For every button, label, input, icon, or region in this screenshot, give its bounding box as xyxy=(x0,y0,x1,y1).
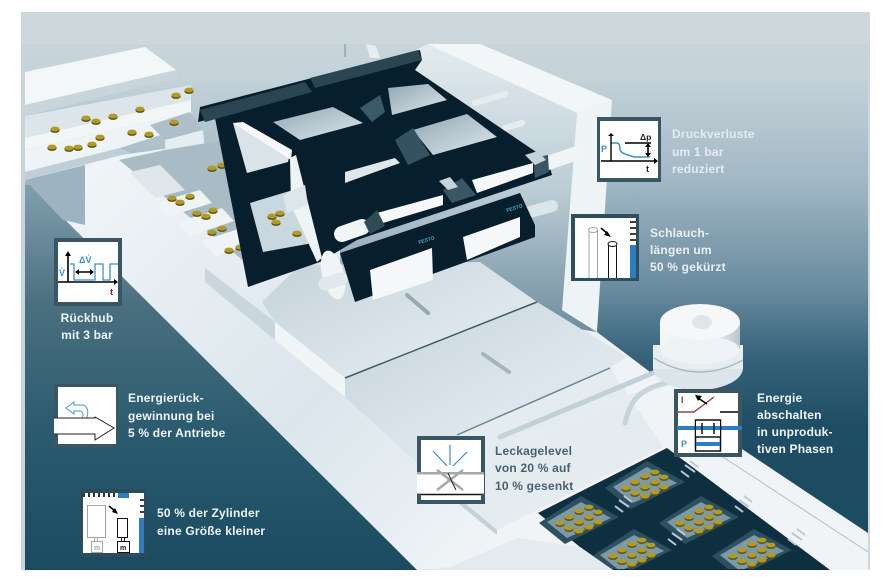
icon: energy recovery xyxy=(54,384,118,448)
icon: pressure drop: P xyxy=(601,144,607,154)
lower white rail xyxy=(417,538,613,570)
left dark floor xyxy=(25,185,332,488)
text: Rückhub: Rückhub xyxy=(61,311,113,325)
icon: flow rate pulse: V̇ xyxy=(59,268,65,278)
text: Druckverluste: Druckverluste xyxy=(672,127,755,141)
icon: pressure drop xyxy=(597,117,661,182)
valve cylinder xyxy=(653,304,743,390)
text: Energie abschalten: in unproduk- xyxy=(757,425,833,439)
icon: leakage xyxy=(417,436,485,504)
text: Zylinder: 50 % der Zylinder xyxy=(157,506,260,520)
text: Schlauchlängen: 50 % gekürzt xyxy=(650,260,726,274)
left edge strip xyxy=(21,44,25,570)
text: Leckagelevel: Leckagelevel xyxy=(495,444,572,458)
pill compartments xyxy=(119,141,243,260)
right frame upright xyxy=(340,44,612,332)
icon: pressure drop: Δp xyxy=(640,132,651,142)
text: Druckverluste: reduziert xyxy=(672,162,724,176)
text: Rückhub: mit 3 bar xyxy=(61,328,113,342)
upper film roller xyxy=(342,151,580,234)
lower film roll: FESTO xyxy=(506,203,524,214)
film windows xyxy=(388,84,447,115)
film tray with blister packs xyxy=(538,448,830,570)
text: Leckagelevel: 10 % gesenkt xyxy=(495,479,573,493)
text: Energie abschalten: tiven Phasen xyxy=(757,442,833,456)
film web xyxy=(198,50,552,287)
icon: switch off energy: P xyxy=(681,439,687,449)
icon: flow rate pulse xyxy=(54,238,122,306)
roll brand marks: FESTO xyxy=(418,235,436,246)
icon: flow rate pulse: t xyxy=(110,287,113,297)
icon: switch off energy xyxy=(674,389,742,457)
right edge strip xyxy=(868,12,870,570)
icon: smaller cylinder: m xyxy=(94,545,100,552)
text: Leckagelevel: von 20 % auf xyxy=(495,461,572,475)
icon: pressure drop: t xyxy=(646,164,649,174)
hopper conveyor xyxy=(25,47,205,225)
icon: smaller cylinder xyxy=(80,489,147,557)
icon: smaller cylinder: m xyxy=(120,545,126,552)
text: Schlauchlängen: längen um xyxy=(650,243,712,257)
text: Schlauchlängen: Schlauch- xyxy=(650,226,709,240)
icon: flow rate pulse: ΔV̇ xyxy=(79,255,91,265)
text: Energie abschalten: Energie xyxy=(757,391,803,405)
icon: shorter hoses xyxy=(571,214,639,281)
machine bed with rails xyxy=(25,130,868,570)
text: Druckverluste: um 1 bar xyxy=(672,145,724,159)
forming plates xyxy=(262,262,663,535)
text: Energierückgewinnung: 5 % der Antriebe xyxy=(128,426,226,440)
text: Energierückgewinnung: Energierück- xyxy=(128,391,204,405)
text: Energierückgewinnung: gewinnung bei xyxy=(128,409,215,423)
icon: switch off energy: I xyxy=(681,395,684,405)
text: Energie abschalten: abschalten xyxy=(757,408,822,422)
pneumatic pipes xyxy=(500,373,670,442)
rear rods xyxy=(345,44,522,128)
lower film roll xyxy=(316,193,552,302)
text: Zylinder: eine Größe kleiner xyxy=(157,524,265,538)
